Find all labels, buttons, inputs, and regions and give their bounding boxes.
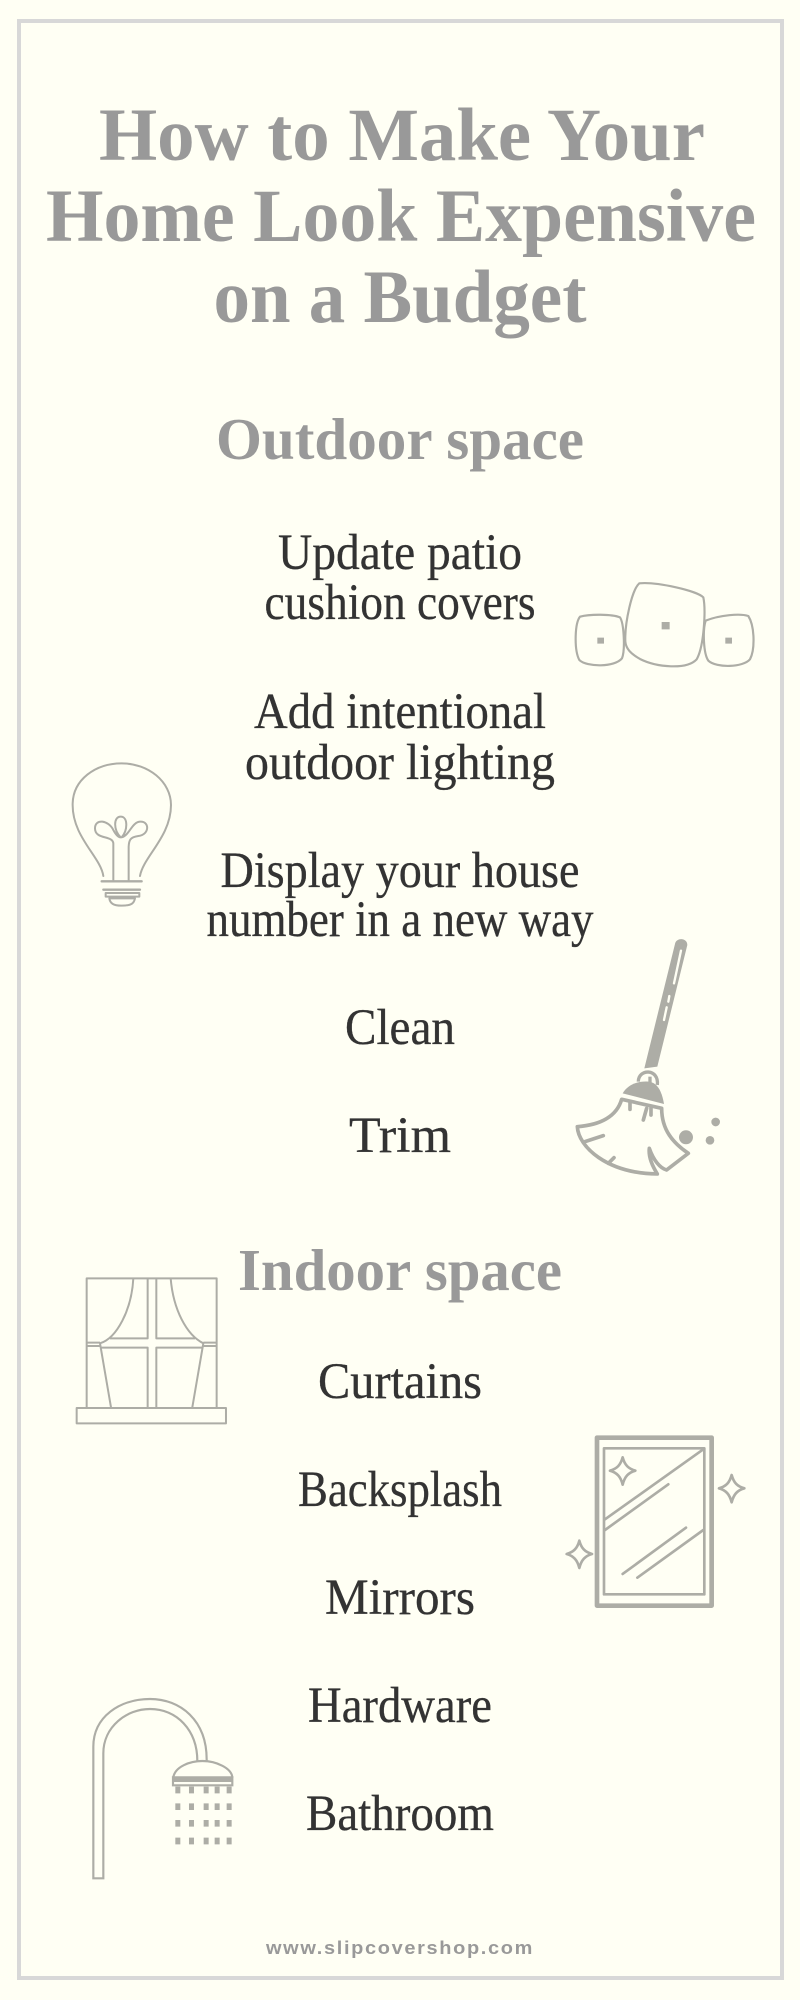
icon: shower head <box>93 1699 232 1878</box>
indoor item: backsplash: Backsplash <box>298 1462 502 1518</box>
outdoor item: add intentional outdoor lighting <box>245 684 555 791</box>
title: How to Make Your <box>99 94 705 177</box>
heading: indoor space: Indoor space <box>238 1237 562 1303</box>
shower pipe and head <box>93 1699 232 1878</box>
heading: outdoor space: Outdoor space <box>216 406 584 472</box>
title <box>46 94 756 339</box>
broom handle <box>644 939 687 1068</box>
outdoor item: add intentional outdoor lighting: outdoor lighting <box>245 735 555 791</box>
outdoor item: trim: Trim <box>349 1108 451 1164</box>
outdoor item: display your house number: Display your house <box>220 843 580 899</box>
title: on a Budget <box>214 256 587 339</box>
indoor item: curtains: Curtains <box>318 1354 482 1410</box>
icon: window with curtains <box>77 1278 226 1423</box>
dust dots <box>679 1118 720 1145</box>
outdoor item: clean: Clean <box>345 1000 455 1056</box>
outdoor item: display your house number <box>206 843 594 948</box>
outdoor item: display your house number: number in a new way <box>206 892 594 948</box>
indoor item: mirrors: Mirrors <box>325 1570 475 1626</box>
indoor item: hardware: Hardware <box>308 1678 492 1734</box>
title: Home Look Expensive <box>46 175 756 258</box>
icon: broom <box>577 939 720 1174</box>
icon: light bulb <box>73 763 171 906</box>
outdoor item: update patio cushion covers: cushion covers <box>264 575 536 631</box>
shower water drops <box>175 1787 232 1844</box>
broom bristles <box>577 1099 688 1174</box>
indoor item: bathroom: Bathroom <box>306 1786 494 1842</box>
outdoor item: update patio cushion covers: Update patio <box>278 525 522 581</box>
icon: cushions <box>576 583 754 666</box>
outdoor item: add intentional outdoor lighting: Add intentional <box>254 684 546 740</box>
footer website: www.slipcovershop.com <box>265 1938 534 1958</box>
icon: mirror with sparkles <box>567 1438 744 1606</box>
outdoor item: update patio cushion covers <box>264 525 536 631</box>
broom head <box>623 1072 664 1104</box>
